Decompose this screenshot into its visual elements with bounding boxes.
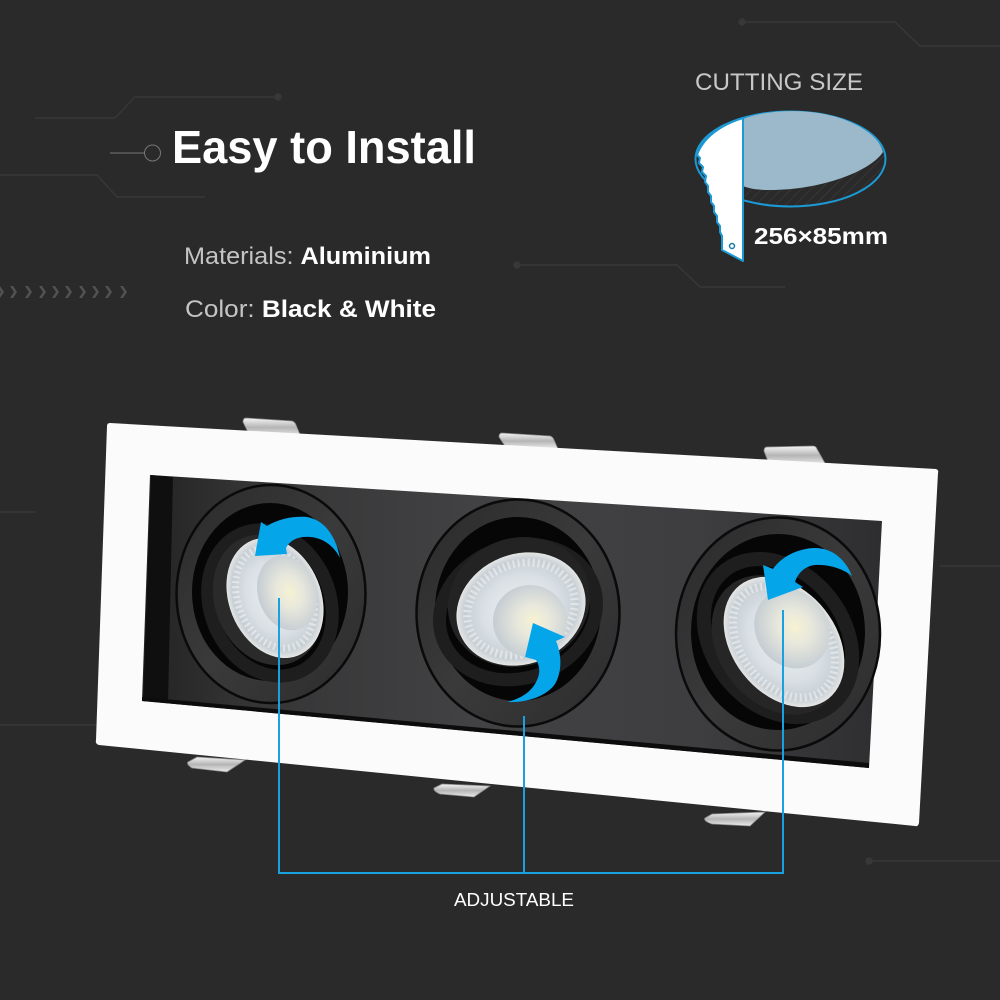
- dimension text: 256×85mm: [754, 223, 888, 249]
- frame opening: [142, 475, 882, 768]
- product: triple downlight fixture: [96, 418, 938, 826]
- bottom shadow: [142, 697, 869, 768]
- materials text: Materials: Aluminium: [184, 243, 431, 270]
- color text: Color: Black & White: [185, 296, 436, 323]
- right lamp: [673, 518, 883, 750]
- left wall of opening: [143, 475, 173, 702]
- adjustable label: ADJUSTABLE: [454, 890, 574, 910]
- title: Easy to Install: [172, 121, 476, 173]
- adjustable bracket lines: [278, 598, 784, 873]
- cutting size label: CUTTING SIZE: [695, 69, 863, 96]
- chevron row: [0, 286, 127, 298]
- middle lamp: [416, 500, 620, 726]
- adjustment arrow: middle: [507, 623, 565, 702]
- icon: cutting hole with saw: [696, 111, 886, 261]
- adjustment arrow: left: [255, 517, 340, 558]
- adjustment arrow: right: [763, 548, 852, 600]
- spring clips: [188, 418, 826, 826]
- white frame: [96, 423, 938, 826]
- title marker icon: [110, 145, 160, 161]
- left lamp: [176, 485, 366, 703]
